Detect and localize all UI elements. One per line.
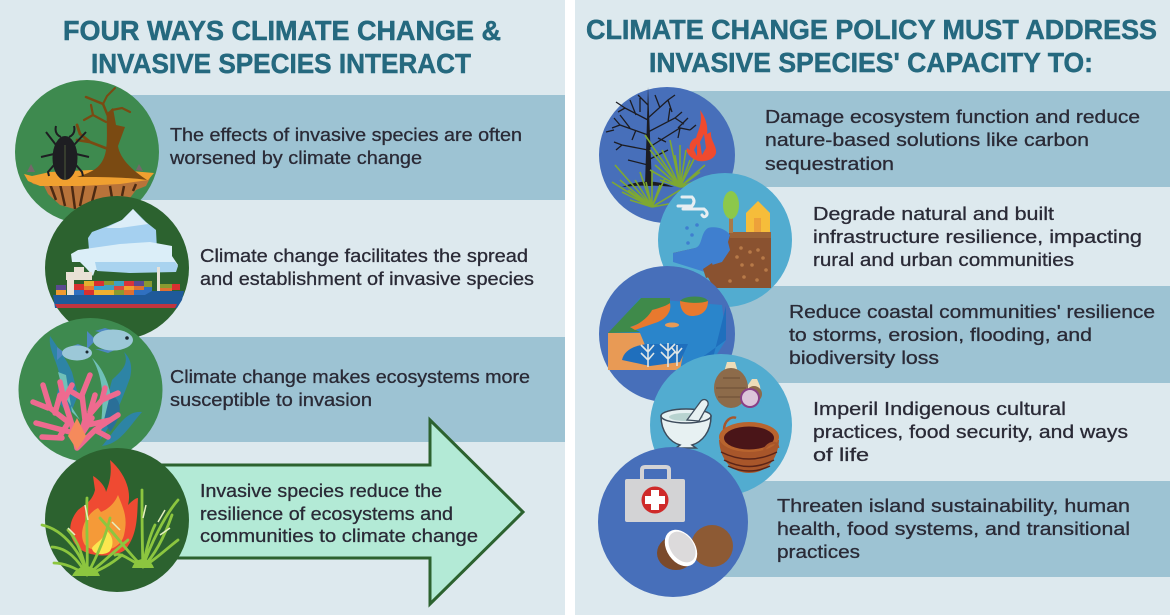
text: policy item 5: practices xyxy=(777,541,860,562)
text: item 4 xyxy=(200,480,478,546)
text: policy item 4: practices, food security, and ways xyxy=(813,421,1128,442)
icon: coral, seaweed and fish xyxy=(18,318,162,462)
text: item 2: Climate change facilitates the spread xyxy=(200,245,528,266)
text: policy item 3: Reduce coastal communities' resilience xyxy=(789,301,1155,322)
text: policy item 1 xyxy=(765,106,1140,174)
text: item 3: susceptible to invasion xyxy=(170,389,372,410)
icon: taro, mortar and basket xyxy=(650,354,792,496)
icon: beetle and dead tree on island xyxy=(15,80,159,224)
band: policy item 3 xyxy=(680,286,1170,383)
text: item 3: Climate change makes ecosystems more xyxy=(170,366,530,387)
heading: policy xyxy=(586,14,1157,78)
icon: burnt tree, grass and fire xyxy=(599,87,735,223)
heading: four ways xyxy=(63,15,501,79)
text: policy item 5 xyxy=(777,495,1130,562)
icon: storm wave and eroding shoreline xyxy=(658,173,792,307)
icon: iceberg and container ship xyxy=(45,196,189,340)
text: policy item 1: Damage ecosystem function and reduce xyxy=(765,106,1140,127)
panel: four ways xyxy=(0,0,565,615)
icon: first aid kit and coconut xyxy=(598,447,748,597)
text: policy item 2: Degrade natural and built xyxy=(813,203,1055,224)
text: policy item 5: health, food systems, and transitional xyxy=(777,518,1130,539)
text: policy item 5: Threaten island sustainability, human xyxy=(777,495,1130,516)
text: policy item 3: to storms, erosion, flooding, and xyxy=(789,324,1092,345)
text: item 1: The effects of invasive species are often xyxy=(170,124,522,145)
text: policy item 3 xyxy=(789,301,1155,368)
text: policy item 2 xyxy=(813,203,1142,270)
text: item 4: communities to climate change xyxy=(200,525,478,546)
band: item 1 xyxy=(120,95,565,200)
text: item 4: resilience of ecosystems and xyxy=(200,503,453,524)
icon: flames and grass xyxy=(42,448,189,592)
text: policy item 4: Imperil Indigenous cultural xyxy=(813,398,1066,419)
text: item 2: and establishment of invasive species xyxy=(200,268,534,289)
heading: policy: CLIMATE CHANGE POLICY MUST ADDRESS xyxy=(586,14,1157,45)
heading: four ways: FOUR WAYS CLIMATE CHANGE & xyxy=(63,15,501,46)
text: item 4: Invasive species reduce the xyxy=(200,480,442,501)
panel: policy xyxy=(575,0,1170,615)
text: policy item 2: rural and urban communities xyxy=(813,249,1074,270)
text: item 3 xyxy=(170,366,530,410)
text: policy item 1: sequestration xyxy=(765,153,894,174)
text: policy item 2: infrastructure resilience, impacting xyxy=(813,226,1142,247)
band: policy item 1 xyxy=(680,91,1170,187)
text: policy item 1: nature-based solutions like carbon xyxy=(765,129,1089,150)
band: policy item 5 xyxy=(680,481,1170,577)
text: item 2 xyxy=(200,245,534,289)
band: item 3 xyxy=(120,337,565,442)
heading: four ways: INVASIVE SPECIES INTERACT xyxy=(91,48,471,79)
heading: policy: INVASIVE SPECIES' CAPACITY TO: xyxy=(649,47,1093,78)
text: item 1 xyxy=(169,124,522,168)
text: policy item 3: biodiversity loss xyxy=(789,347,939,368)
arrow: item 4 xyxy=(130,420,523,604)
text: policy item 4: of life xyxy=(813,444,869,465)
text: policy item 4 xyxy=(813,398,1128,465)
icon: coastal cross-section xyxy=(599,266,735,402)
text: item 1: worsened by climate change xyxy=(169,147,422,168)
